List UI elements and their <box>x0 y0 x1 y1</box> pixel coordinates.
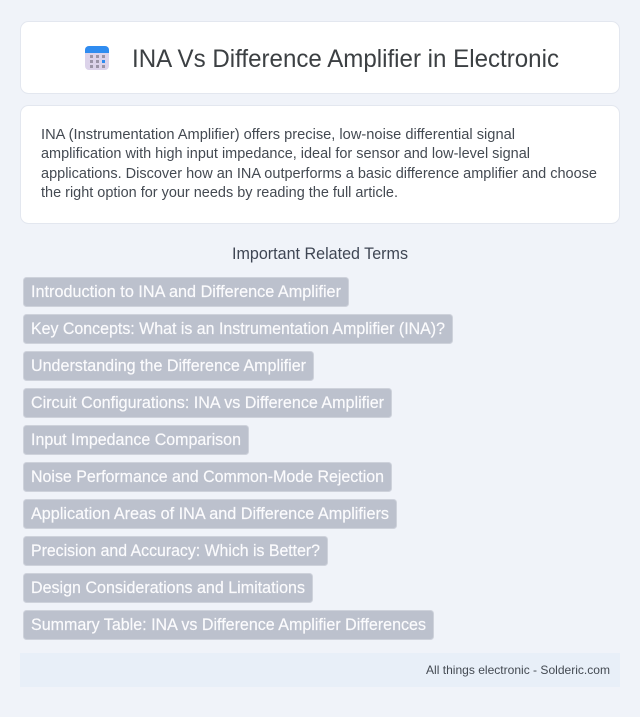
term chip 1 <box>24 278 348 306</box>
icon: calendar <box>85 46 109 70</box>
footer <box>20 653 620 687</box>
term chip 3: Understanding the Difference Amplifier <box>31 356 306 375</box>
term chip 4: Circuit Configurations: INA vs Difference Amplifier <box>31 393 384 412</box>
term chip 10 <box>24 610 434 640</box>
term chip 7: Application Areas of INA and Difference Amplifiers <box>31 504 389 523</box>
panel: description <box>20 106 620 224</box>
description text: the right option for your needs by reading the full article. <box>41 185 398 201</box>
footer credit: All things electronic - Solderic.com <box>426 663 610 677</box>
term chip 4 <box>24 388 392 418</box>
term chip 5 <box>24 426 248 454</box>
term chip 2 <box>24 314 452 344</box>
heading: important related terms: Important Related Terms <box>232 245 408 263</box>
term chip 8: Precision and Accuracy: Which is Better? <box>31 541 320 560</box>
term chip 9 <box>24 574 312 602</box>
list of related terms <box>24 278 452 640</box>
description text: INA (Instrumentation Amplifier) offers precise, low-noise differential signal <box>41 127 515 143</box>
term chip 9: Design Considerations and Limitations <box>31 578 305 597</box>
description text: amplification with high input impedance, ideal for sensor and low-level signal <box>41 146 530 162</box>
term chip 3 <box>24 352 314 380</box>
header panel <box>20 22 620 94</box>
term chip 1: Introduction to INA and Difference Amplifier <box>31 282 341 301</box>
description text: applications. Discover how an INA outperforms a basic difference amplifier and choose <box>41 166 597 182</box>
title: INA Vs Difference Amplifier in Electronic <box>132 45 559 73</box>
term chip 8 <box>24 536 328 566</box>
term chip 5: Input Impedance Comparison <box>31 430 241 449</box>
term chip 10: Summary Table: INA vs Difference Amplifier Differences <box>31 615 426 634</box>
term chip 7 <box>24 500 396 528</box>
term chip 6 <box>24 462 392 492</box>
term chip 6: Noise Performance and Common-Mode Rejection <box>31 467 384 486</box>
description text <box>41 127 597 201</box>
term chip 2: Key Concepts: What is an Instrumentation Amplifier (INA)? <box>31 319 445 338</box>
